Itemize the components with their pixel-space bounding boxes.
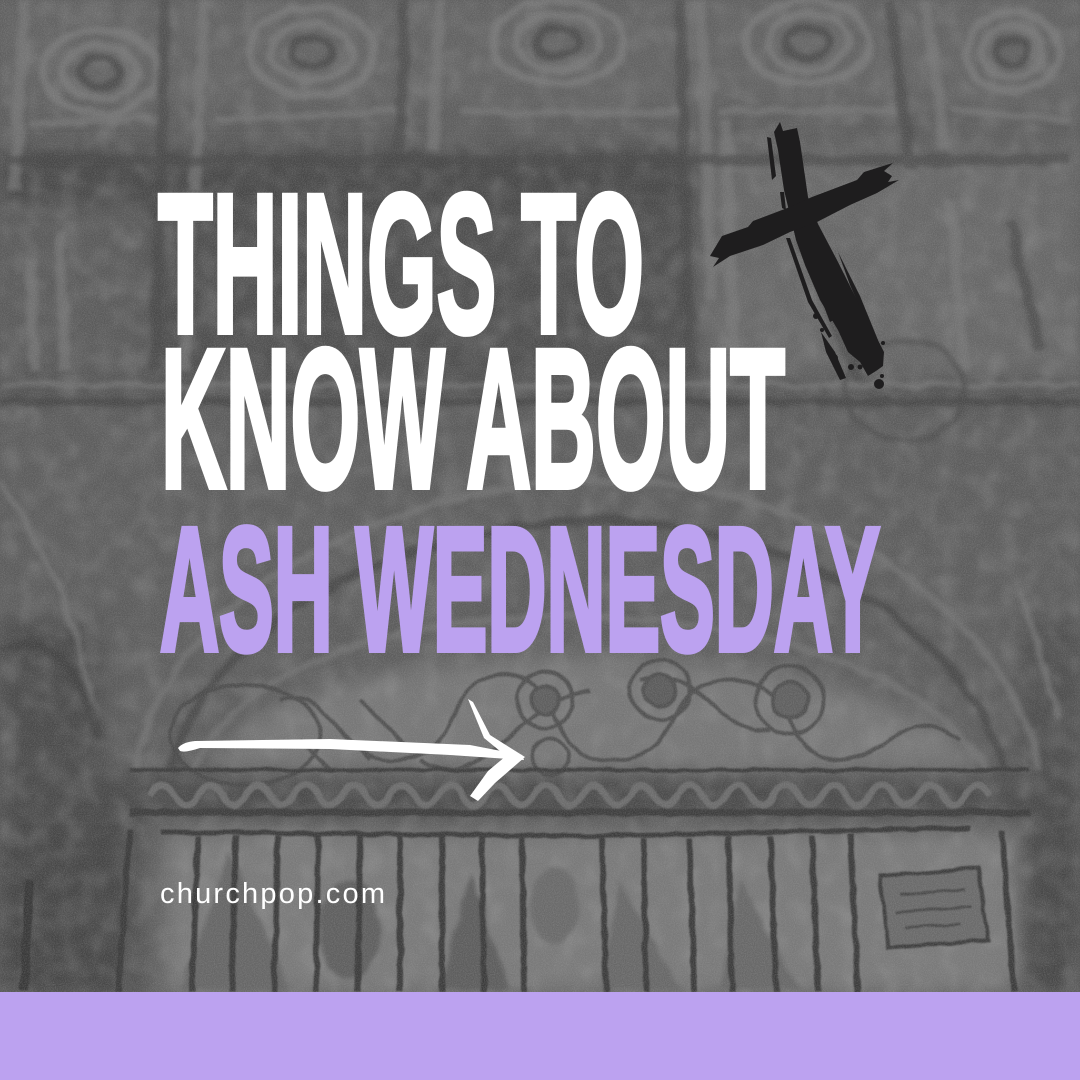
website label: churchpop.com	[160, 878, 385, 910]
arrow	[178, 699, 525, 801]
facade arch	[135, 480, 1040, 770]
wall plaque	[880, 868, 988, 948]
tympanum scrollwork	[170, 660, 960, 785]
iron railing	[24, 828, 1014, 992]
icon: black brush-stroke cross	[710, 122, 899, 389]
title	[158, 153, 880, 688]
bottom purple band	[0, 992, 1080, 1080]
top roundels and columns	[0, 0, 1080, 770]
frieze	[130, 768, 1030, 816]
painted figures behind railing	[180, 850, 800, 990]
